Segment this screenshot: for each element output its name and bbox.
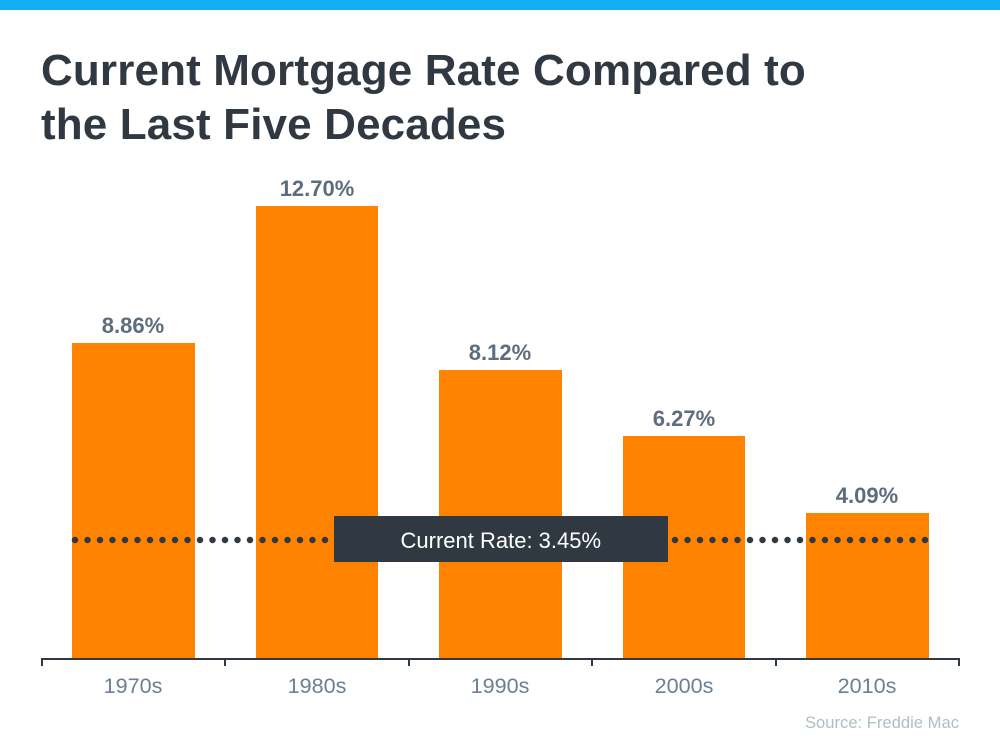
current rate callout: Current Rate: 3.45% [401, 528, 601, 553]
value labels [102, 176, 898, 508]
top banner [0, 0, 1000, 10]
category labels: 1990s [471, 673, 530, 698]
bar chart [42, 176, 960, 698]
title: the Last Five Decades [41, 100, 506, 149]
value labels: 12.70% [280, 176, 354, 201]
category labels: 2000s [655, 673, 714, 698]
value labels: 8.12% [469, 340, 531, 365]
x axis [42, 658, 960, 666]
bar: 2010s [806, 513, 929, 658]
category labels: 1970s [104, 673, 163, 698]
title: Current Mortgage Rate Compared to [41, 46, 806, 95]
current rate dotted line [75, 537, 926, 543]
bar: 1970s [72, 343, 195, 658]
current rate callout [334, 516, 668, 562]
bar: 1980s [256, 206, 378, 658]
bar: 2000s [623, 436, 745, 658]
title [41, 46, 806, 149]
category labels: 1980s [288, 673, 347, 698]
source note: Source: Freddie Mac [805, 713, 959, 732]
bar: 1990s [439, 370, 562, 658]
category labels: 2010s [838, 673, 897, 698]
value labels: 4.09% [836, 483, 898, 508]
category labels [104, 673, 897, 698]
value labels: 6.27% [653, 406, 715, 431]
value labels: 8.86% [102, 313, 164, 338]
